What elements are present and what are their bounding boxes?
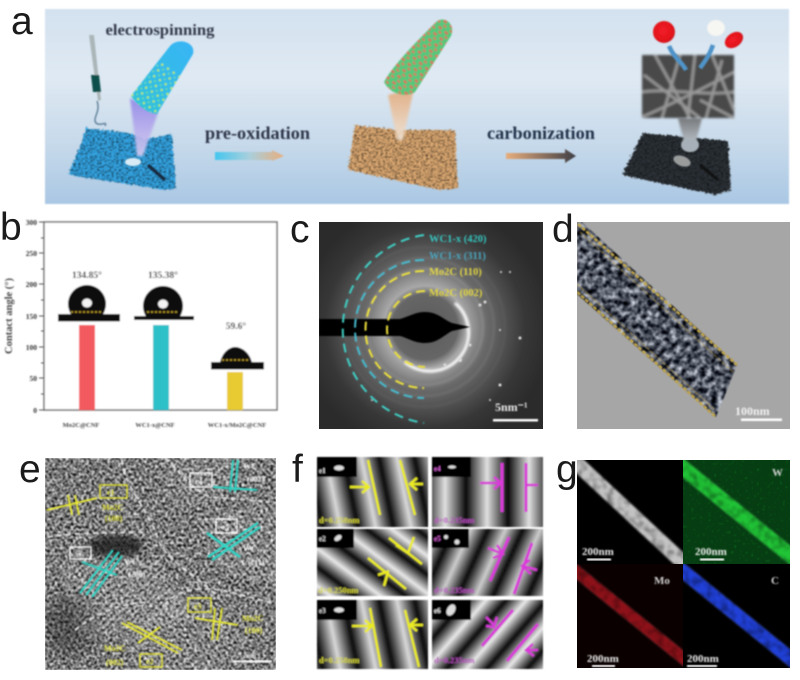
tile e3: e3	[319, 607, 326, 615]
x axis labels: WC1-x/Mo2C@CNF	[208, 422, 266, 429]
ring labels: WC1-x (311)	[429, 251, 486, 262]
white phase labels: e6	[76, 550, 84, 559]
blue fibre mat	[68, 128, 176, 190]
tile e2: e2	[319, 535, 326, 543]
white phase labels: WC	[243, 544, 257, 553]
beam: grey magnification	[678, 118, 702, 150]
panel e: HRTEM image	[44, 458, 276, 670]
panel letter f: f	[292, 448, 303, 491]
HAADF map: 200nm	[582, 546, 614, 558]
white label boxes	[70, 473, 237, 559]
brown fibre mat	[348, 125, 458, 190]
panel a: synthesis schematic	[45, 9, 789, 204]
white phase labels: e5	[222, 523, 230, 532]
y tick labels: 200	[26, 280, 37, 289]
beam stop	[319, 312, 470, 343]
tile e3	[317, 600, 428, 669]
black fibre mat	[622, 133, 731, 195]
SEM micrograph inset	[642, 55, 734, 118]
cyan lattice markers	[80, 460, 260, 597]
C map	[679, 564, 796, 668]
ring labels: Mo2C (110)	[429, 267, 482, 278]
value labels: 134.85°	[72, 270, 102, 281]
Mo map: Mo	[654, 575, 670, 587]
y tick labels: 50	[30, 374, 37, 383]
bar: WC1-x/Mo2C@CNF	[227, 372, 243, 410]
ring labels: WC1-x (420)	[429, 234, 487, 245]
lens on black mat	[672, 138, 718, 180]
white phase labels: (200)	[128, 570, 146, 579]
HAADF map	[577, 460, 683, 564]
panel g: EDS elemental maps	[572, 459, 796, 668]
yellow phase labels: (002)	[106, 658, 124, 667]
y tick labels: 250	[26, 249, 37, 258]
lattice fringes	[44, 458, 276, 670]
W map	[683, 460, 790, 564]
tile e2	[317, 529, 428, 596]
value labels: 59.6°	[226, 321, 246, 332]
yellow lattice markers	[47, 495, 238, 653]
y tick labels: 300	[26, 218, 37, 227]
tile e6: e6	[434, 607, 441, 615]
panel letter a: a	[11, 0, 33, 43]
tile e4: e4	[434, 465, 441, 473]
yellow phase labels	[102, 488, 264, 667]
icon: syringe	[89, 35, 106, 126]
icon: gas molecules	[653, 20, 746, 51]
W map: W	[772, 467, 783, 479]
yellow phase labels: e3	[194, 602, 202, 611]
Mo map: 200nm	[587, 653, 619, 665]
droplet 2	[134, 286, 194, 326]
icon: magnified blue fibre	[131, 41, 193, 114]
beam: violet magnification	[130, 98, 158, 156]
carbon nanofibre	[577, 222, 737, 417]
C map: C	[771, 575, 779, 587]
value labels	[72, 270, 246, 332]
white phase labels: WC	[243, 462, 257, 471]
droplet 3	[211, 347, 264, 370]
panel letter d: d	[552, 208, 574, 251]
HRTEM noise texture	[45, 458, 276, 670]
diffraction spots	[371, 271, 522, 401]
arrow: carbonization	[506, 149, 576, 163]
tile e1: e1	[319, 467, 326, 475]
scale label and bar	[735, 404, 782, 421]
scale label and bar: 2nm	[243, 652, 256, 660]
grain boundary dashes	[48, 458, 276, 630]
ring labels	[429, 234, 487, 299]
bar: Mo2C@CNF	[79, 325, 95, 410]
heading: pre-oxidation: pre-oxidation	[205, 123, 310, 143]
tile e4	[432, 457, 543, 527]
white phase labels: WC	[124, 557, 138, 566]
beam: tan magnification	[388, 88, 414, 140]
yellow phase labels: (100)	[105, 514, 123, 523]
y axis title: Contact angle (°)	[4, 278, 15, 354]
scale label and bar: 100nm	[735, 404, 770, 418]
panel d: TEM image	[577, 222, 790, 429]
x axis labels: WC1-x@CNF	[135, 422, 175, 429]
white phase labels: (002)	[247, 475, 265, 484]
heading: carbonization: carbonization	[487, 123, 595, 143]
yellow phase labels: e1	[107, 488, 115, 497]
TEM background	[577, 222, 790, 429]
tile e2: d=0.250nm	[318, 585, 359, 595]
scale label and bar	[493, 400, 538, 422]
x axis labels: Mo2C@CNF	[63, 422, 99, 429]
scale label and bar	[233, 652, 272, 662]
tile e3: d=0.258nm	[319, 655, 360, 665]
Mo map	[572, 564, 688, 668]
panel f: inverse FFT lattice images	[317, 457, 543, 669]
tile e4: d=0.235nm	[434, 515, 475, 525]
dashed ring markers	[343, 235, 425, 423]
scale label and bar: 5nm⁻¹	[495, 400, 528, 414]
C map: 200nm	[687, 653, 719, 665]
diffraction rings	[356, 258, 494, 396]
tile e1	[317, 457, 428, 527]
yellow phase labels: Mo2C	[242, 614, 264, 623]
panel letter g: g	[556, 448, 578, 491]
panel letter b: b	[0, 206, 22, 249]
y tick labels	[26, 218, 37, 415]
yellow phase labels: Mo2C	[102, 503, 124, 512]
y tick labels: 150	[26, 312, 37, 321]
dashed fibre edges	[577, 224, 737, 417]
panel b: contact angle bar chart	[4, 218, 277, 429]
y tick labels: 0	[33, 406, 37, 415]
ring labels: Mo2C (002)	[429, 288, 483, 299]
tile e1: d=0.258nm	[319, 515, 360, 525]
x axis labels	[63, 422, 266, 429]
diffraction background	[319, 222, 543, 429]
bar: WC1-x@CNF	[153, 325, 169, 410]
icon: magnified green fibre	[384, 20, 452, 95]
schematic background	[45, 9, 789, 204]
yellow phase labels: e2	[146, 657, 154, 666]
tile e5: d=0.235nm	[434, 585, 475, 595]
panel c: SAED pattern	[319, 222, 543, 429]
lens and needle on blue mat	[125, 158, 165, 180]
heading: electrospinning: electrospinning	[106, 22, 214, 39]
droplet 1	[58, 285, 120, 323]
white phase labels: e4	[195, 477, 203, 486]
yellow phase labels: (100)	[245, 626, 263, 635]
y tick labels: 100	[26, 343, 37, 352]
plot frame and axis ticks	[39, 222, 277, 410]
panel letter e: e	[19, 448, 41, 491]
white phase labels	[76, 462, 265, 579]
white phase labels: (111)	[248, 558, 265, 567]
W map: 200nm	[695, 546, 727, 558]
yellow label boxes	[100, 485, 211, 667]
yellow phase labels: Mo2C	[104, 644, 126, 653]
tile e6	[432, 600, 543, 669]
value labels: 135.38°	[148, 270, 178, 281]
tile e5: e5	[434, 535, 441, 543]
arrows: gas flow	[669, 45, 713, 70]
tile e5	[432, 529, 543, 596]
arrow: pre-oxidation	[215, 150, 284, 161]
panel letter c: c	[290, 208, 310, 251]
tile e6: d=0.235nm	[434, 655, 475, 665]
